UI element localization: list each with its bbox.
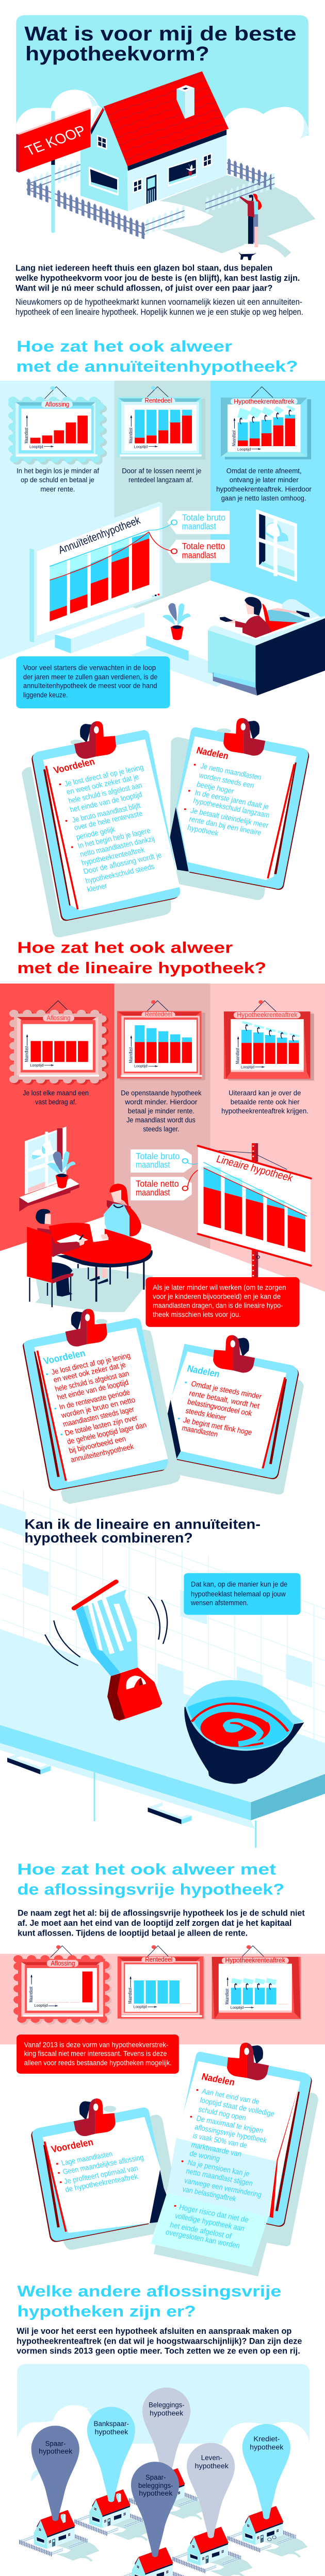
- heading: combineren: Kan ik de lineaire en annuïteiten-: [24, 1517, 261, 1532]
- frame: rentedeel: Looptijd: [134, 445, 148, 449]
- list: nadelen: volledige hypotheek aan: [174, 2212, 246, 2233]
- intro: aflossingsvrij: [18, 1908, 305, 1938]
- callout: vanaf 2013: Vanaf 2013 is deze vorm van hypotheekverstrek-: [24, 2041, 168, 2049]
- screen chart: [204, 1162, 307, 1252]
- tv: Annuïteitenhypotheek: [55, 514, 143, 556]
- frame: rentedeel: [117, 1000, 205, 1080]
- list: nadelen: schuld nog open: [198, 2105, 247, 2122]
- list: nadelen: is vaak 50% van de: [192, 2131, 248, 2150]
- list: nadelen: het einde afgelost of: [169, 2221, 233, 2241]
- list: nadelen: maandlasten: [181, 1424, 219, 1439]
- balloon: bankspaarhypotheek: Bankspaar-: [94, 2420, 129, 2428]
- list: nadelen: beetje hoger: [196, 780, 235, 795]
- list: voordelen: het einde van de looptijd: [69, 790, 143, 814]
- panel: village with balloons: [17, 2364, 310, 2576]
- clipboard: voordelen: [22, 721, 181, 937]
- balloon: kredniethypotheek: [242, 2424, 290, 2519]
- sofa with person: [208, 597, 325, 696]
- sign: te koop: [16, 108, 91, 233]
- list: voordelen: In het begin heb je lagere: [77, 826, 152, 850]
- column captions: Omdat de rente afneemt,: [226, 467, 302, 475]
- list: nadelen: In de eerste jaren daalt je: [194, 788, 270, 811]
- frame: rentedeel: [118, 1945, 205, 2020]
- tag: totale bruto: maandlast: [136, 1160, 170, 1170]
- tag: totale bruto: Totale bruto: [136, 1151, 180, 1162]
- title: hypotheekvorm?: [25, 43, 209, 65]
- callout: vanaf 2013: [17, 2035, 179, 2074]
- tv chart: [50, 530, 149, 621]
- clipboard: voordelen: Voordelen: [50, 2137, 94, 2155]
- callout: minder werken: theek misschien iets voor jou.: [153, 1311, 241, 1319]
- heading: andere aflossingsvrije hypotheken: Welke andere aflossingsvrije: [17, 2282, 281, 2300]
- floor rug: [131, 644, 228, 687]
- counter front and cabinets: [0, 1725, 325, 1848]
- wall columns: [0, 984, 325, 1293]
- frame: hypotheekrenteaftrek: Maandlast: [232, 430, 237, 446]
- column captions: De openstaande hypotheek: [121, 1089, 202, 1097]
- list: nadelen: vanwege een vermindering: [183, 2176, 263, 2199]
- tag: totale netto: maandlast: [182, 550, 216, 561]
- callout: starters: annuïteitenhypotheek de meest voor de hand: [23, 682, 157, 690]
- plant in window: [186, 164, 196, 171]
- panel: lineaire room: [0, 984, 325, 1391]
- frame: hypotheekrenteaftrek: Maandlast: [235, 1048, 240, 1064]
- list: voordelen: Je lost direct af op je lening: [63, 763, 144, 788]
- illustration: couple and dog: [238, 194, 262, 260]
- list: nadelen: Na je pensioen kan je: [187, 2158, 251, 2178]
- list: nadelen: looptijd staat de volledige: [199, 2096, 275, 2119]
- list: nadelen: Je begint met flink hoge: [182, 1416, 253, 1437]
- clipboard: nadelen: Nadelen: [201, 2072, 236, 2088]
- frame: aflossing: Maandlast: [28, 1986, 34, 2003]
- list: voordelen: worden je bruto en netto: [60, 1396, 136, 1420]
- frame: hypotheekrenteaftrek: [221, 386, 311, 460]
- list: voordelen: De totale lasten zijn over: [64, 1414, 139, 1437]
- list: voordelen: annuïteitenhypotheek: [70, 1442, 135, 1464]
- list: voordelen: In de rentevaste periode: [58, 1388, 131, 1411]
- frame: aflossing: [13, 386, 102, 461]
- tag: totale bruto: maandlast: [182, 521, 216, 532]
- list: voordelen: Je profiteert optimaal van: [63, 2164, 139, 2186]
- list: nadelen: rente betaalt, wordt het: [188, 1389, 261, 1411]
- frame: hypotheekrenteaftrek: Hypotheekrenteaftrek: [225, 1957, 285, 1964]
- panel: annuiteiten voor- en nadelen: [22, 718, 309, 937]
- frame: hypotheekrenteaftrek: Looptijd: [241, 1065, 254, 1069]
- list: voordelen: de gehele looptijd lager dan: [66, 1421, 148, 1446]
- clouds: [17, 2405, 310, 2481]
- list: nadelen: Je betaalt uiteindelijk meer: [189, 806, 270, 830]
- list: nadelen: [184, 762, 271, 838]
- balloon: spaarhypotheek: hypotheek: [39, 2448, 72, 2455]
- list: voordelen: en weet ook zeker dat je: [66, 773, 140, 796]
- column captions: ontvang je later minder: [230, 476, 299, 484]
- frame: aflossing: Aflossing: [46, 1014, 71, 1022]
- tag: totale bruto: [131, 1149, 204, 1173]
- frame: rentedeel: Looptijd: [134, 1064, 148, 1068]
- list: voordelen: periode gelijk: [75, 825, 117, 841]
- balloon: bankspaarhypotheek: hypotheek: [95, 2428, 128, 2436]
- frame: aflossing: Maandlast: [24, 1046, 29, 1062]
- list: nadelen: van belastingaftrek: [182, 2185, 237, 2204]
- clipboard: nadelen: Nadelen: [195, 745, 230, 761]
- list: voordelen: [56, 2150, 144, 2194]
- list: nadelen: belastingvoordeel ook: [186, 1398, 253, 1418]
- balloon: bankspaarhypotheek: [87, 2407, 135, 2502]
- frame: aflossing: Looptijd: [34, 2004, 47, 2008]
- column captions: vast bedrag af.: [35, 1098, 77, 1106]
- clipboard: nadelen: [151, 2043, 318, 2276]
- balloon: beleggingshypotheek: Beleggings-: [149, 2401, 185, 2409]
- list: voordelen: hele schuld is afgelost aan: [68, 781, 143, 805]
- list: voordelen: hypotheekrenteaftrek: [80, 845, 146, 867]
- bowl: [184, 1680, 304, 1784]
- heading: annuiteitenhypotheek: met de annuïteitenhypotheek?: [16, 358, 298, 376]
- frame: rentedeel: Maandlast: [128, 427, 134, 444]
- list: nadelen: [165, 2087, 275, 2250]
- list: nadelen: Aan het eind van de: [201, 2087, 261, 2106]
- clipboard: voordelen: [23, 1309, 181, 1504]
- tv: [29, 502, 163, 642]
- balloon: levenhypotheek: hypotheek: [195, 2462, 229, 2470]
- frame: aflossing: Aflossing: [45, 401, 69, 409]
- list: nadelen: overgesloten kan worden: [165, 2228, 241, 2250]
- list: voordelen: netto maandlasten dankzij: [79, 835, 156, 859]
- heading: lineaire hypotheek: met de lineaire hypotheek?: [17, 959, 266, 977]
- balloon: spaarbeleggingshypotheek: hypotheek: [139, 2489, 173, 2498]
- list: voordelen: bij bijvoorbeeld een: [68, 1435, 127, 1455]
- frame: hypotheekrenteaftrek: Looptijd: [231, 2006, 243, 2010]
- heading: andere aflossingsvrije hypotheken: hypotheken zijn er?: [17, 2303, 196, 2320]
- heading: annuiteitenhypotheek: Hoe zat het ook alweer: [17, 337, 232, 355]
- list: voordelen: hypotheekschuld steeds: [85, 862, 156, 885]
- list: voordelen: Door de aflossing wordt je: [83, 851, 163, 876]
- list: nadelen: marktwaarde van: [190, 2141, 242, 2158]
- frame: aflossing: Looptijd: [30, 1063, 43, 1067]
- frame: aflossing: Aflossing: [51, 1960, 75, 1968]
- frame: aflossing: [18, 1945, 107, 2021]
- clouds: [16, 90, 309, 172]
- heading: aflossingsvrije hypotheek: [17, 1860, 284, 1899]
- frame: hypotheekrenteaftrek: Maandlast: [225, 1988, 230, 2005]
- list: voordelen: het einde van de looptijd: [56, 1378, 129, 1402]
- intro text: Lang niet iedereen heeft thuis een glazen bol staan, dus bepalen: [15, 263, 272, 273]
- callout: starters: Voor veel starters die verwachten in de loop: [23, 664, 156, 672]
- column captions: betaal je minder rente.: [128, 1107, 194, 1115]
- column captions: op de schuld en betaal je: [21, 476, 94, 484]
- intro text: [15, 263, 303, 317]
- list: voordelen: maandlasten steeds lager: [62, 1405, 135, 1429]
- column captions: steeds lager.: [143, 1125, 180, 1133]
- balloon: levenhypotheek: [187, 2443, 235, 2538]
- callout: dat kan: [184, 1573, 301, 1615]
- balloon: spaarhypotheek: [31, 2426, 79, 2521]
- frame: rentedeel: Maandlast: [128, 1047, 134, 1063]
- balloon: kredniethypotheek: Krediet-: [253, 2435, 280, 2443]
- callout: vanaf 2013: king fiscaal niet meer interessant. Tevens is deze: [24, 2050, 167, 2058]
- frame: aflossing: Maandlast: [24, 427, 29, 444]
- list: nadelen: De maximaal te krijgen: [196, 2114, 264, 2135]
- houses: [19, 2466, 307, 2576]
- pink band: [0, 1954, 325, 2044]
- title: Wat is voor mij de beste: [24, 23, 297, 45]
- plant: [163, 603, 191, 640]
- balloon: kredniethypotheek: hypotheek: [250, 2444, 283, 2451]
- balloon: beleggingshypotheek: [142, 2387, 190, 2483]
- frame: hypotheekrenteaftrek: [212, 1945, 302, 2021]
- heading: lineaire hypotheek: [17, 939, 266, 977]
- list: voordelen: [46, 1351, 148, 1464]
- callout: vanaf 2013: alleen voor reeds bestaande hypotheken mogelijk.: [24, 2059, 172, 2067]
- frame: rentedeel: Looptijd: [134, 2005, 147, 2009]
- frame: rentedeel: Maandlast: [128, 1988, 133, 2004]
- list: voordelen: de hypotheekrenteaftrek: [64, 2172, 139, 2194]
- balloon: levenhypotheek: Leven-: [201, 2454, 222, 2462]
- window: [256, 509, 297, 582]
- tag: totale netto: maandlast: [136, 1188, 170, 1198]
- folder and papers: [56, 1216, 116, 1247]
- column captions: rentedeel langzaam af.: [128, 476, 193, 484]
- frame: hypotheekrenteaftrek: [224, 1000, 314, 1080]
- wall tiles: [0, 1489, 325, 1741]
- column captions: wordt minder. Hierdoor: [124, 1098, 198, 1106]
- panel: aflossingsvrij voor- en nadelen: [17, 2035, 318, 2276]
- tag: totale netto: Totale netto: [136, 1179, 179, 1189]
- list: nadelen: Omdat je steeds minder: [190, 1380, 263, 1401]
- list: nadelen: netto maandlast stijgen: [185, 2167, 254, 2188]
- column captions: In het begin los je minder af: [17, 467, 100, 475]
- table shadow: [35, 1267, 153, 1312]
- clipboard: voordelen: Voordelen: [42, 1348, 87, 1367]
- column captions: Uiteraard kan je over de: [229, 1089, 301, 1097]
- frame: rentedeel: Rentedeel: [145, 1956, 172, 1963]
- column captions: betaalde rente ook hier: [231, 1098, 300, 1106]
- heading: lineaire hypotheek: Hoe zat het ook alweer: [17, 939, 233, 957]
- list: nadelen: rente dan bij een lineaire: [188, 815, 263, 837]
- tag: totale netto: Totale netto: [182, 541, 225, 551]
- man on chair: [27, 1209, 85, 1307]
- panel: hero illustration: [16, 15, 316, 260]
- list: voordelen: kleiner: [86, 882, 108, 894]
- list: voordelen: over de hele rentevaste: [73, 809, 143, 832]
- frame: rentedeel: Rentedeel: [144, 397, 172, 404]
- intro: andere hypotheken: [17, 2326, 302, 2355]
- wall columns: [0, 381, 325, 663]
- heading: combineren: [24, 1517, 261, 1546]
- callout: minder werken: voor je kinderen bijvoorbeeld) en je kan de: [153, 1293, 281, 1301]
- panel: kitchen scene: [0, 1573, 325, 1848]
- counter: [0, 1629, 325, 1802]
- list: nadelen: Je netto maandlasten: [200, 762, 263, 782]
- panel: kitchen wall and counter: [0, 1489, 325, 1802]
- tag: totale bruto: [149, 511, 230, 534]
- list: voordelen: hele schuld is afgelost aan: [54, 1369, 130, 1393]
- clipboard: nadelen: [163, 1335, 304, 1495]
- heading: aflossingsvrije hypotheek: de aflossingsvrije hypotheek?: [17, 1881, 284, 1899]
- list: nadelen: hypotheek: [186, 823, 220, 838]
- balloon: spaarbeleggingshypotheek: Spaar-: [145, 2473, 166, 2482]
- column captions: Je lost elke maand een: [23, 1089, 89, 1097]
- heading: combineren: hypotheek combineren?: [24, 1530, 193, 1546]
- balloon: spaarbeleggingshypotheek: [131, 2462, 179, 2557]
- list: nadelen: Hoger risico dat niet de: [178, 2203, 250, 2224]
- callout: minder werken: maandlasten dragen, dan is de lineaire hypo-: [153, 1302, 283, 1310]
- frame: rentedeel: Rentedeel: [144, 1011, 172, 1018]
- callout: minder werken: Als je later minder wil werken (om te zorgen: [153, 1284, 286, 1292]
- heading: aflossingsvrije hypotheek: Hoe zat het ook alweer met: [17, 1860, 276, 1878]
- panel: aflossingsvrij charts: [0, 1945, 325, 2044]
- callout: starters: der jaren meer te zullen gaan verdienen, is de: [23, 673, 157, 681]
- tag: totale netto: [131, 1168, 204, 1200]
- clipboard: nadelen: Nadelen: [186, 1364, 221, 1380]
- projector screen: [198, 1143, 311, 1278]
- list: nadelen: steeds kleiner: [185, 1406, 228, 1422]
- list: voordelen: Je lost direct af op je lening: [50, 1351, 132, 1377]
- clipboard: nadelen: [170, 718, 309, 900]
- illustration: house with fence: [26, 62, 316, 258]
- sign: te koop: TE KOOP: [23, 123, 89, 159]
- list: nadelen: aflossingsvrije hypotheek: [194, 2123, 268, 2145]
- floor: [0, 581, 325, 728]
- list: nadelen: de woning: [188, 2149, 221, 2163]
- heading: andere aflossingsvrije hypotheken: [17, 2282, 281, 2320]
- charts: lineaire frames: [14, 1000, 314, 1081]
- frame: aflossing: [14, 1001, 104, 1081]
- intro: aflossingsvrij: kunt aflossen. Tijdens de looptijd betaal je alleen de rente.: [18, 1928, 248, 1938]
- tag: totale bruto: Totale bruto: [182, 513, 225, 523]
- balloon: spaarbeleggingshypotheek: beleggings-: [138, 2482, 173, 2490]
- list: voordelen: [59, 763, 163, 894]
- balloon: spaarhypotheek: Spaar-: [45, 2440, 66, 2448]
- intro text: Want wil je nú meer schuld aflossen, of juist over een paar jaar?: [15, 283, 272, 293]
- title: [24, 23, 297, 65]
- side table: [146, 636, 189, 661]
- charts: annuiteiten frames: [13, 386, 311, 461]
- sky panel: [16, 15, 308, 135]
- frame: hypotheekrenteaftrek: Hypotheekrenteaftrek: [237, 1011, 298, 1019]
- list: nadelen: worden steeds een: [198, 771, 255, 790]
- frame: hypotheekrenteaftrek: Hypotheekrenteaftrek: [234, 398, 295, 405]
- callout: minder werken: [145, 1277, 300, 1327]
- window with plant: [19, 1127, 79, 1212]
- frame: hypotheekrenteaftrek: Looptijd: [237, 447, 251, 451]
- projector screen: Lineaire hypotheek: [215, 1153, 295, 1184]
- list: voordelen: Je bruto maandlast blijft: [71, 802, 142, 824]
- column captions: [23, 1089, 308, 1133]
- list: voordelen: Lage maandlasten: [60, 2150, 113, 2167]
- heading: annuiteitenhypotheek: [16, 337, 298, 376]
- list: nadelen: hypotheekschuld langzaam: [192, 796, 271, 820]
- balloon: beleggingshypotheek: hypotheek: [150, 2410, 183, 2417]
- list: voordelen: en weet ook zeker dat je: [52, 1361, 127, 1384]
- column captions: Je maandlast wordt dus: [126, 1116, 196, 1124]
- frame: rentedeel: [118, 386, 205, 460]
- list: nadelen: [178, 1380, 263, 1439]
- panel: lineaire voor- en nadelen: [23, 1309, 304, 1504]
- callout: dat kan: Dat kan, op die manier kun je de: [191, 1581, 287, 1588]
- blender: [45, 1582, 167, 1721]
- clipboard: voordelen: [31, 2098, 172, 2250]
- column captions: Door af te lossen neemt je: [122, 467, 202, 475]
- tag: totale netto: [149, 532, 230, 563]
- callout: dat kan: wensen afstemmen.: [190, 1599, 248, 1607]
- callout: starters: [16, 656, 170, 708]
- panel: annuiteiten room: [0, 381, 325, 728]
- floor: [0, 1213, 325, 1391]
- callout: starters: liggende keuze.: [23, 691, 68, 699]
- clipboard: voordelen: Voordelen: [52, 756, 96, 776]
- callout: dat kan: hypotheeklast helemaal op jouw: [191, 1590, 286, 1598]
- list: voordelen: Geen maandelijkse aflossing: [62, 2153, 144, 2176]
- column captions: meer rente.: [40, 485, 75, 494]
- sky panel: [17, 2364, 310, 2444]
- table: [48, 1223, 153, 1302]
- frame: aflossing: Looptijd: [29, 445, 43, 449]
- column captions: [17, 467, 312, 502]
- woman: [89, 1183, 141, 1284]
- tv stand: [55, 607, 144, 653]
